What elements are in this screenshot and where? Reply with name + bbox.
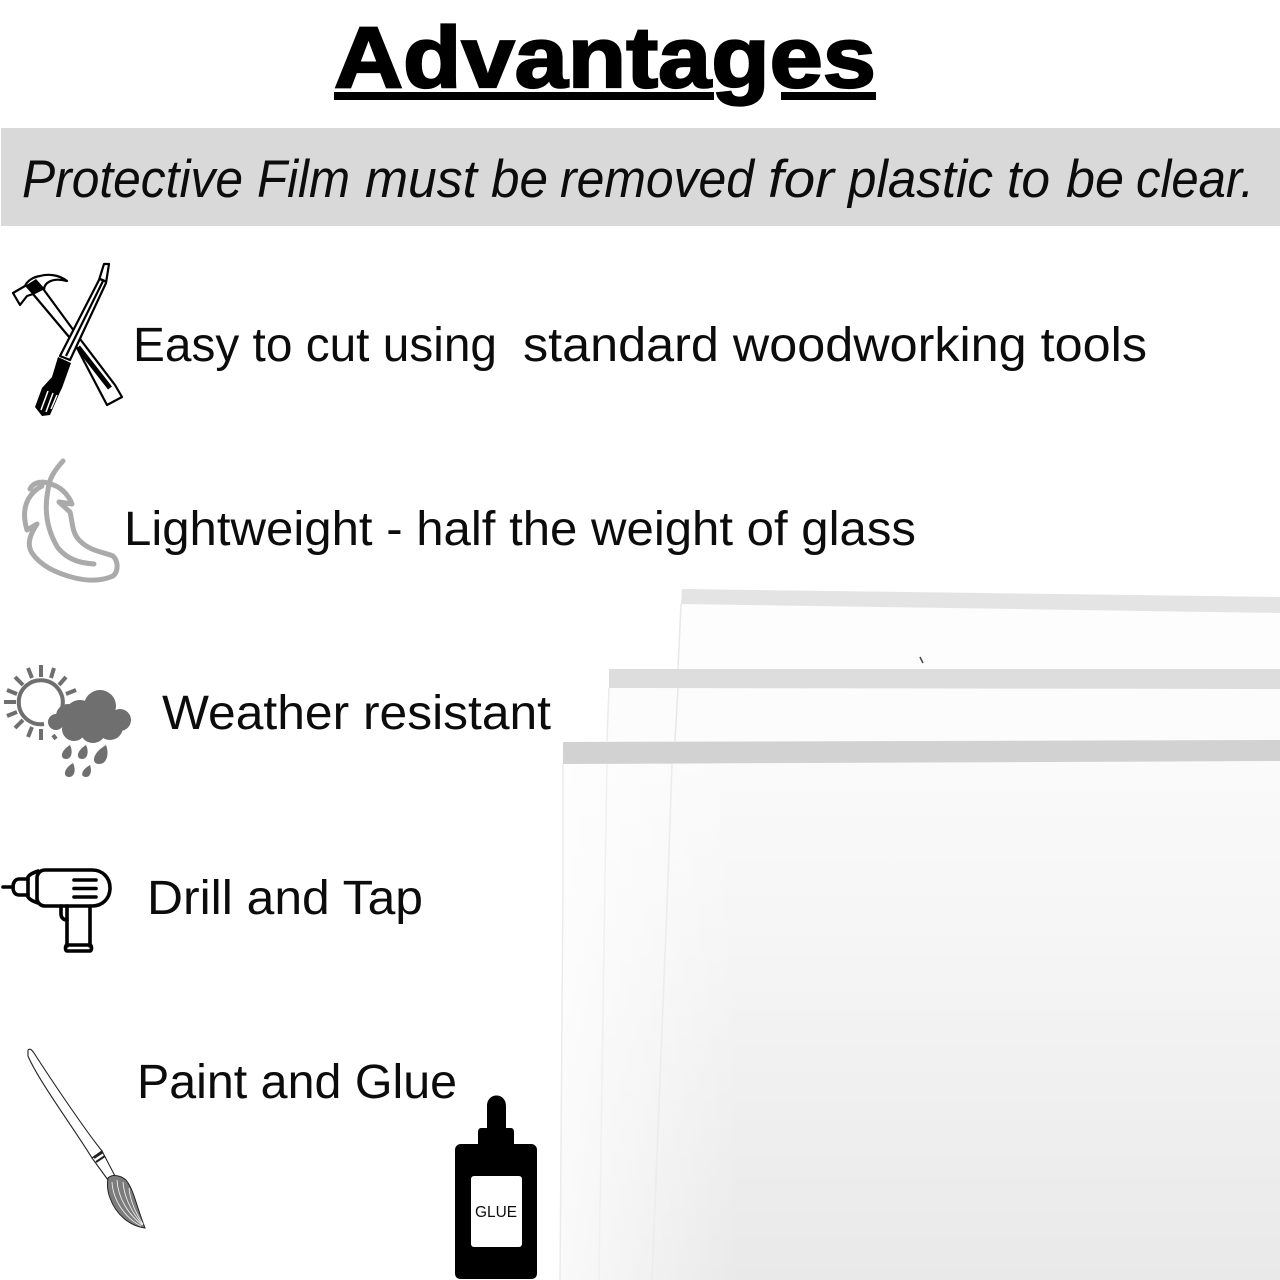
photo: stacked clear plastic sheets xyxy=(560,589,1280,1280)
banner: protective film notice: must xyxy=(365,150,479,209)
text: lightweight: Lightweight - half the weight of glass xyxy=(124,503,916,556)
banner: protective film notice: be xyxy=(1066,150,1124,209)
icon: glue bottle: GLUE xyxy=(475,1204,517,1221)
banner: protective film notice: clear. xyxy=(1136,150,1254,209)
banner: protective film notice: Protective xyxy=(22,150,243,209)
banner: protective film notice: to xyxy=(1007,150,1050,209)
text: paint and glue: Paint and Glue xyxy=(137,1056,457,1109)
banner: protective film notice: removed xyxy=(560,150,755,209)
banner: protective film notice: plastic xyxy=(846,150,993,209)
banner: protective film notice: Film xyxy=(257,150,350,209)
icon: hammer and screwdriver xyxy=(13,264,122,416)
banner: protective film notice: for xyxy=(768,150,836,209)
icon: paint brush xyxy=(28,1049,145,1228)
banner: protective film notice xyxy=(1,128,1280,226)
icon: feather xyxy=(25,461,117,580)
text: easy to cut xyxy=(133,319,1147,372)
banner: protective film notice: be xyxy=(491,150,548,209)
title: Advantages xyxy=(334,10,876,106)
icon: glue bottle xyxy=(455,1096,537,1279)
text: weather resistant: Weather resistant xyxy=(162,687,551,740)
text: easy to cut: Easy to cut using xyxy=(133,319,497,372)
text: easy to cut: standard woodworking tools xyxy=(523,319,1147,372)
icon: drill xyxy=(3,870,110,951)
text: drill and tap: Drill and Tap xyxy=(147,872,423,925)
icon: sun, cloud and rain xyxy=(4,665,131,777)
